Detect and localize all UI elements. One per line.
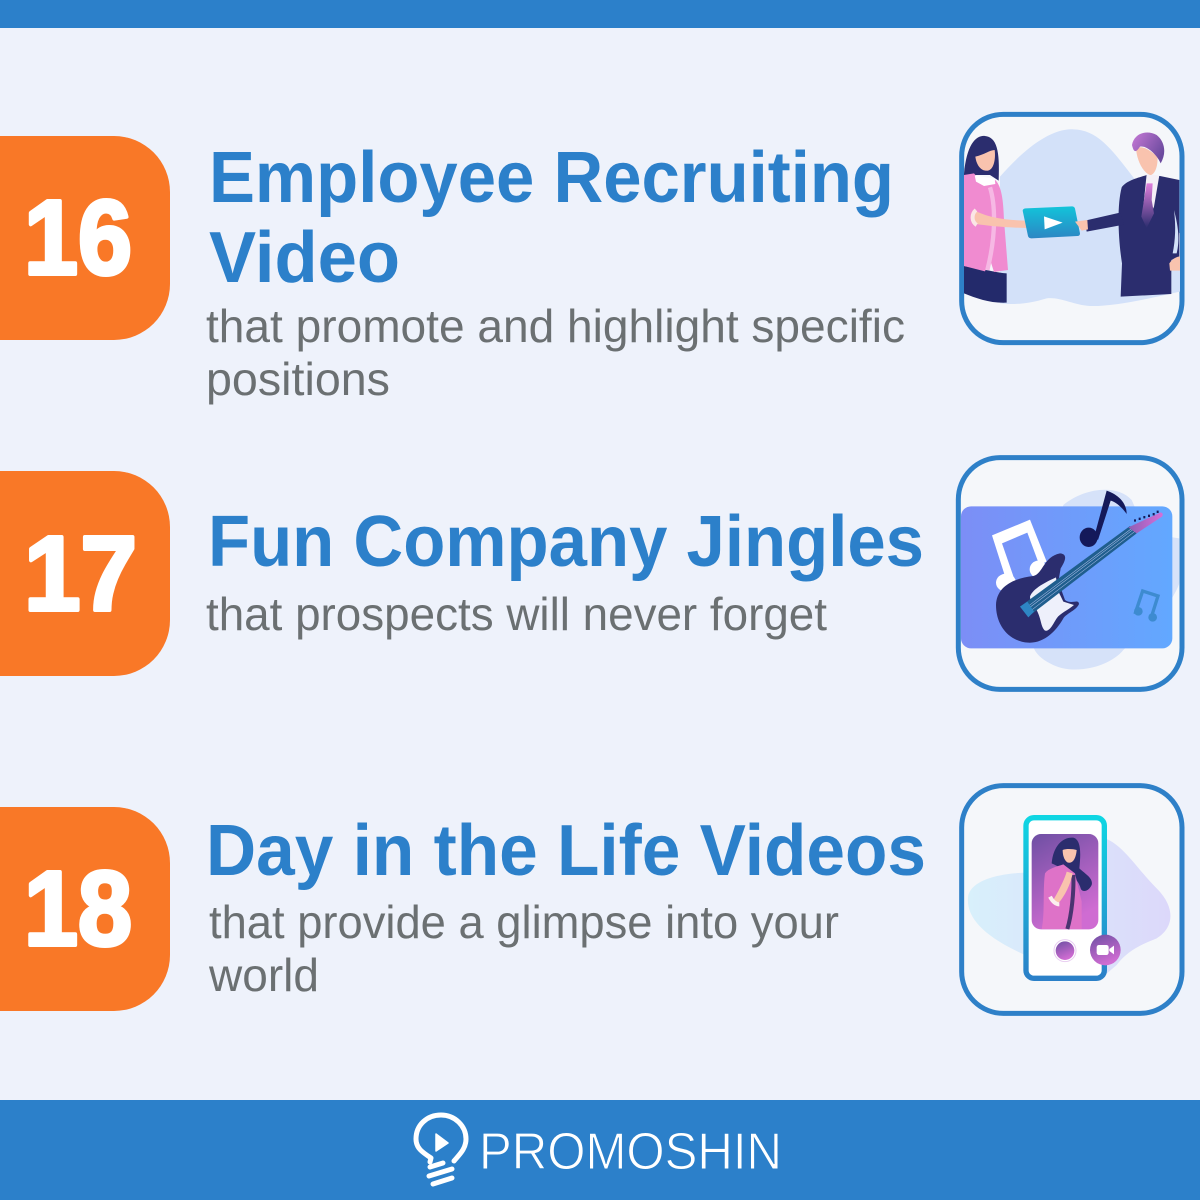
logo: Promoshin xyxy=(416,1115,782,1184)
item 17 xyxy=(0,458,1182,689)
number badge 18: 18 xyxy=(24,850,132,968)
number badge 17 xyxy=(0,471,170,676)
description 17: that prospects will never forget xyxy=(206,588,827,640)
bottom bar xyxy=(0,1100,1200,1200)
description 16 xyxy=(206,300,905,405)
heading: Fun Company Jingles: Fun Company Jingles xyxy=(208,502,924,582)
description 18: that provide a glimpse into your xyxy=(209,896,839,948)
illustration: phone recording video xyxy=(962,786,1182,1013)
heading: Employee Recruiting Video: Employee Recruiting xyxy=(209,138,894,218)
description 18 xyxy=(208,896,839,1001)
heading: Employee Recruiting Video xyxy=(209,138,894,298)
description 16: that promote and highlight specific xyxy=(206,300,905,352)
top bar xyxy=(0,0,1200,28)
illustration: handing over video card xyxy=(962,114,1182,343)
heading: Employee Recruiting Video: Video xyxy=(209,218,400,298)
icon: light bulb with play button xyxy=(416,1115,466,1184)
number badge 16: 16 xyxy=(24,179,132,297)
item 16 xyxy=(0,114,1182,405)
heading: Day in the Life Videos: Day in the Life Videos xyxy=(206,811,926,891)
illustration: guitar and music notes xyxy=(958,458,1182,689)
description 18: world xyxy=(208,949,319,1001)
wordmark: PROMOSHIN xyxy=(479,1123,782,1181)
item 18 xyxy=(0,786,1182,1013)
description 16: positions xyxy=(206,353,390,405)
number badge 16 xyxy=(0,136,170,340)
number badge 18 xyxy=(0,807,170,1011)
number badge 17: 17 xyxy=(24,515,137,633)
